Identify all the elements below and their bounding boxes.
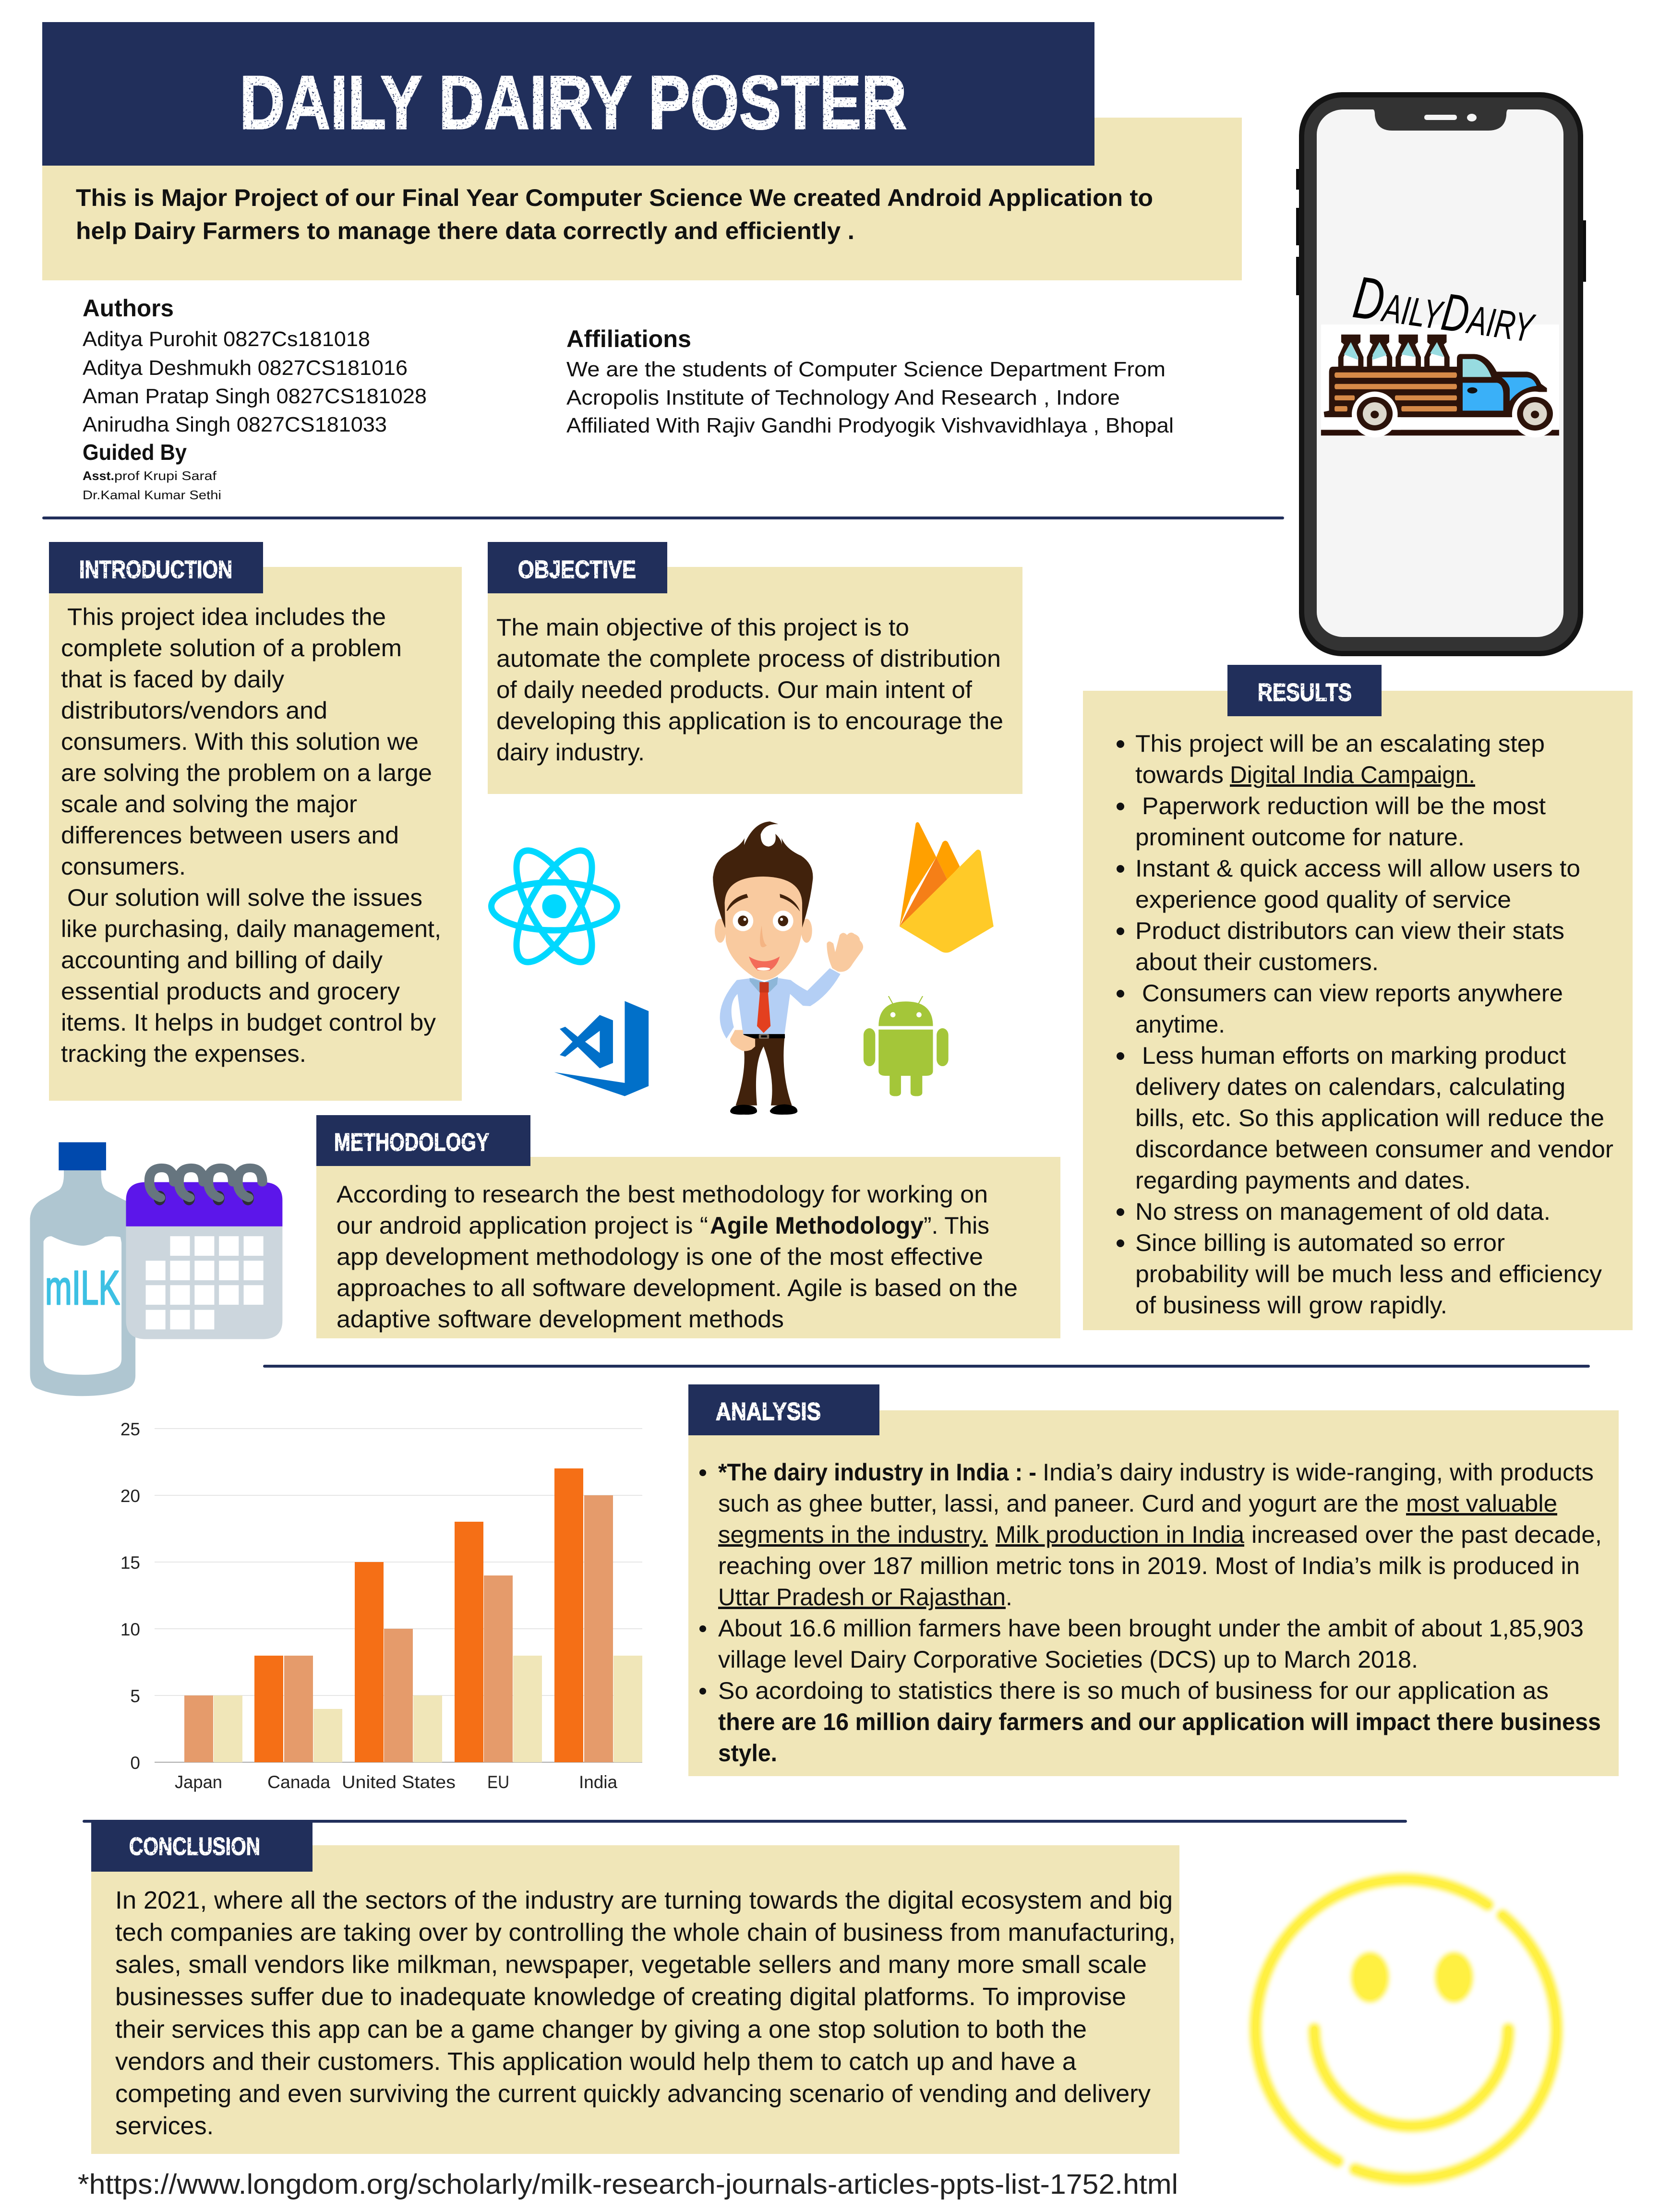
- calendar rings: [154, 1191, 254, 1205]
- analysis text: increased over the past decade,: [1251, 1521, 1602, 1548]
- methodology text: our android application project is “: [337, 1212, 708, 1239]
- bars: series two: [184, 1495, 613, 1762]
- affiliations block: We are the students of Computer Science Department From: [566, 358, 1166, 381]
- subtitle text: [76, 184, 1153, 244]
- panel: title banner: [42, 22, 1242, 280]
- conclusion text: vendors and their customers. This application would help them to catch up and have a: [115, 2048, 1076, 2076]
- conclusion text: sales, small vendors like milkman, newspaper, vegetable sellers and many more small scale: [115, 1951, 1147, 1979]
- title bar: [42, 22, 1094, 166]
- authors block: Aditya Purohit 0827Cs181018: [83, 327, 370, 351]
- objective text: developing this application is to encourage the: [496, 708, 1003, 734]
- logo lettering: DAILYDAIRY: [1349, 264, 1540, 355]
- methodology background: [316, 1157, 1060, 1338]
- icon: phone with Daily Dairy logo: [1296, 92, 1586, 656]
- panel: analysis: [688, 1384, 1619, 1776]
- y axis labels: 0: [130, 1753, 140, 1773]
- affiliations block: Affiliated With Rajiv Gandhi Prodyogik Vishvavidhlaya , Bhopal: [566, 414, 1174, 437]
- authors block: Authors: [83, 295, 174, 322]
- objective text: of daily needed products. Our main intent of: [496, 676, 972, 703]
- methodology text: ”. This: [924, 1212, 989, 1239]
- analysis text: Milk production in India: [996, 1521, 1244, 1548]
- results text: Consumers can view reports anywhere: [1142, 980, 1563, 1007]
- introduction text: Our solution will solve the issues: [67, 884, 422, 911]
- introduction text: distributors/vendors and: [61, 697, 327, 724]
- x axis labels: United States: [342, 1772, 456, 1792]
- chart grid lines: [155, 1429, 642, 1695]
- introduction text: scale and solving the major: [61, 791, 357, 817]
- phone body: [1299, 92, 1583, 656]
- analysis text: village level Dairy Corporative Societies (DCS) up to March 2018.: [718, 1646, 1418, 1673]
- introduction heading: INTRODUCTION: [79, 556, 232, 584]
- results text: experience good quality of service: [1135, 886, 1511, 913]
- analysis text: reaching over 187 million metric tons in 2019. Most of India’s milk is produced in: [718, 1552, 1580, 1579]
- analysis heading: [688, 1384, 879, 1435]
- phone screen: [1317, 109, 1563, 637]
- analysis text: most valuable: [1406, 1490, 1557, 1517]
- methodology text: adaptive software development methods: [337, 1306, 784, 1333]
- x axis labels: [175, 1772, 617, 1792]
- results text: delivery dates on calendars, calculating: [1135, 1073, 1565, 1100]
- conclusion background: [91, 1845, 1179, 2154]
- panel: results: [1083, 665, 1633, 1330]
- methodology text: [337, 1181, 1018, 1333]
- results text: bills, etc. So this application will reduce the: [1135, 1105, 1604, 1131]
- bars: series three: [214, 1656, 642, 1762]
- conclusion heading: CONCLUSION: [129, 1833, 260, 1861]
- conclusion text: their services this app can be a game changer by giving a one stop solution to both the: [115, 2016, 1087, 2044]
- results text: of business will grow rapidly.: [1135, 1292, 1447, 1319]
- introduction text: complete solution of a problem: [61, 635, 402, 661]
- y axis labels: [120, 1419, 140, 1773]
- methodology heading: METHODOLOGY: [334, 1129, 489, 1156]
- y axis labels: 10: [120, 1620, 140, 1639]
- results text: Paperwork reduction will be the most: [1142, 793, 1546, 819]
- icon: neon smiley: [1256, 1879, 1557, 2179]
- analysis background: [688, 1410, 1619, 1776]
- phone notch: [1373, 109, 1508, 131]
- analysis text: [718, 1459, 1602, 1767]
- x axis labels: India: [579, 1772, 617, 1792]
- bottles: [1338, 335, 1363, 367]
- conclusion text: In 2021, where all the sectors of the industry are turning towards the digital ecosystem and big: [115, 1887, 1173, 1914]
- introduction background: [49, 567, 462, 1101]
- results bullets: [1117, 740, 1124, 1247]
- introduction text: essential products and grocery: [61, 978, 400, 1005]
- conclusion text: services.: [115, 2112, 214, 2140]
- introduction text: accounting and billing of daily: [61, 947, 383, 974]
- introduction text: tracking the expenses.: [61, 1040, 306, 1067]
- bars: series one: [254, 1468, 583, 1762]
- analysis text: So acordoing to statistics there is so much of business for our application as: [718, 1677, 1549, 1704]
- objective text: dairy industry.: [496, 739, 645, 766]
- subtitle text: This is Major Project of our Final Year Computer Science We created Android Application to: [76, 184, 1153, 211]
- logo truck: [1321, 325, 1559, 437]
- hands: [730, 1030, 755, 1051]
- analysis text: About 16.6 million farmers have been brought under the ambit of about 1,85,903: [718, 1615, 1584, 1642]
- objective text: [496, 614, 1003, 766]
- objective text: The main objective of this project is to: [496, 614, 909, 641]
- analysis bullets: [699, 1469, 706, 1695]
- calendar date grid: [146, 1236, 264, 1329]
- results text: about their customers.: [1135, 949, 1379, 975]
- x axis labels: Canada: [267, 1772, 330, 1792]
- authors block: [83, 295, 427, 502]
- results text: Since billing is automated so error: [1135, 1229, 1505, 1256]
- methodology text: Agile Methodology: [710, 1212, 924, 1239]
- analysis text: Uttar Pradesh or Rajasthan: [718, 1584, 1006, 1611]
- introduction text: This project idea includes the: [67, 603, 386, 630]
- introduction text: items. It helps in budget control by: [61, 1009, 436, 1036]
- authors block: Aditya Deshmukh 0827CS181016: [83, 356, 408, 380]
- icon: android robot: [864, 996, 949, 1096]
- results text: probability will be much less and efficiency: [1135, 1261, 1602, 1287]
- introduction text: consumers.: [61, 853, 186, 880]
- introduction text: are solving the problem on a large: [61, 759, 432, 786]
- truck body: [1324, 354, 1547, 417]
- results heading: [1227, 665, 1382, 716]
- conclusion heading: [91, 1821, 313, 1872]
- results background: [1083, 691, 1633, 1330]
- methodology text: approaches to all software development. Agile is based on the: [337, 1274, 1018, 1301]
- authors block: Aman Pratap Singh 0827CS181028: [83, 385, 427, 408]
- results text: prominent outcome for nature.: [1135, 824, 1465, 851]
- analysis text: style.: [718, 1740, 777, 1767]
- results text: regarding payments and dates.: [1135, 1167, 1471, 1194]
- icon: firebase logo: [900, 822, 994, 953]
- objective heading: [488, 542, 667, 593]
- milk label text: mILK: [45, 1261, 120, 1315]
- panel: conclusion: [91, 1821, 1179, 2154]
- introduction text: [61, 603, 441, 1067]
- icon: milk bottle: [30, 1142, 135, 1396]
- authors block: Guided By: [83, 440, 187, 465]
- objective background: [488, 567, 1022, 794]
- results text: Digital India Campaign.: [1230, 761, 1475, 788]
- bar chart: [120, 1419, 642, 1792]
- y axis labels: 20: [120, 1486, 140, 1506]
- analysis text: India’s dairy industry is wide-ranging, with products: [1043, 1459, 1594, 1486]
- methodology heading: [316, 1115, 530, 1166]
- results heading: RESULTS: [1258, 679, 1352, 707]
- analysis text: .: [1006, 1584, 1012, 1611]
- conclusion text: businesses suffer due to inadequate knowledge of creating digital platforms. To improvise: [115, 1983, 1126, 2011]
- results text: Instant & quick access will allow users to: [1135, 855, 1580, 882]
- hair: [713, 821, 813, 927]
- introduction text: consumers. With this solution we: [61, 728, 419, 755]
- analysis heading: ANALYSIS: [716, 1398, 821, 1426]
- subtitle panel background: [42, 118, 1242, 280]
- panel: methodology: [316, 1115, 1060, 1338]
- results text: [1135, 730, 1613, 1319]
- phone side buttons: [1296, 169, 1586, 295]
- panel: objective: [488, 542, 1022, 794]
- results text: discordance between consumer and vendor: [1135, 1136, 1613, 1163]
- introduction text: differences between users and: [61, 822, 399, 849]
- conclusion text: tech companies are taking over by controlling the whole chain of business from manufacturing,: [115, 1919, 1176, 1947]
- x axis labels: Japan: [175, 1772, 222, 1792]
- results text: Less human efforts on marking product: [1142, 1042, 1566, 1069]
- affiliations block: [566, 325, 1174, 437]
- results text: No stress on management of old data.: [1135, 1198, 1551, 1225]
- conclusion text: [115, 1887, 1176, 2140]
- y axis labels: 5: [130, 1686, 140, 1706]
- footnote reference URL: *https://www.longdom.org/scholarly/milk-research-journals-articles-ppts-list-1752.html: [78, 2169, 1178, 2200]
- objective text: automate the complete process of distribution: [496, 645, 1001, 672]
- y axis labels: 15: [120, 1553, 140, 1573]
- authors block: Anirudha Singh 0827CS181033: [83, 413, 387, 436]
- icon: react logo: [492, 840, 617, 973]
- panel: introduction: [49, 542, 462, 1101]
- analysis text: there are 16 million dairy farmers and our application will impact there business: [718, 1708, 1601, 1735]
- authors block: Asst.: [83, 469, 114, 483]
- title: DAILY DAIRY POSTER: [240, 60, 907, 145]
- methodology text: According to research the best methodology for working on: [337, 1181, 988, 1208]
- introduction text: like purchasing, daily management,: [61, 915, 441, 942]
- introduction text: that is faced by daily: [61, 666, 284, 693]
- affiliations block: Acropolis Institute of Technology And Research , Indore: [566, 386, 1120, 409]
- authors block: Dr.Kamal Kumar Sethi: [83, 488, 221, 502]
- affiliations block: Affiliations: [566, 325, 691, 352]
- face: [725, 877, 802, 980]
- icon: waving cartoon man: [713, 821, 863, 1115]
- icon: calendar: [126, 1168, 282, 1339]
- analysis text: *The dairy industry in India : -: [718, 1459, 1036, 1486]
- analysis text: segments in the industry.: [718, 1521, 988, 1548]
- shoes: [730, 1105, 757, 1115]
- methodology text: app development methodology is one of the most effective: [337, 1243, 983, 1270]
- wheels: [1352, 392, 1398, 437]
- x axis labels: EU: [487, 1772, 509, 1792]
- shirt: [720, 968, 841, 1038]
- results text: Product distributors can view their stats: [1135, 917, 1564, 944]
- trousers: [736, 1038, 792, 1106]
- ears: [715, 919, 726, 943]
- icon: visual studio code logo: [554, 1001, 649, 1096]
- introduction heading: [49, 542, 263, 593]
- results text: towards: [1135, 761, 1224, 788]
- results text: This project will be an escalating step: [1135, 730, 1545, 757]
- authors block: prof Krupi Saraf: [114, 469, 217, 483]
- results text: anytime.: [1135, 1011, 1225, 1038]
- analysis text: such as ghee butter, lassi, and paneer. Curd and yogurt are the: [718, 1490, 1399, 1517]
- subtitle text: help Dairy Farmers to manage there data correctly and efficiently .: [76, 217, 854, 244]
- objective heading: OBJECTIVE: [518, 556, 636, 584]
- conclusion text: competing and even surviving the current quickly advancing scenario of vending and delivery: [115, 2080, 1151, 2108]
- y axis labels: 25: [120, 1419, 140, 1439]
